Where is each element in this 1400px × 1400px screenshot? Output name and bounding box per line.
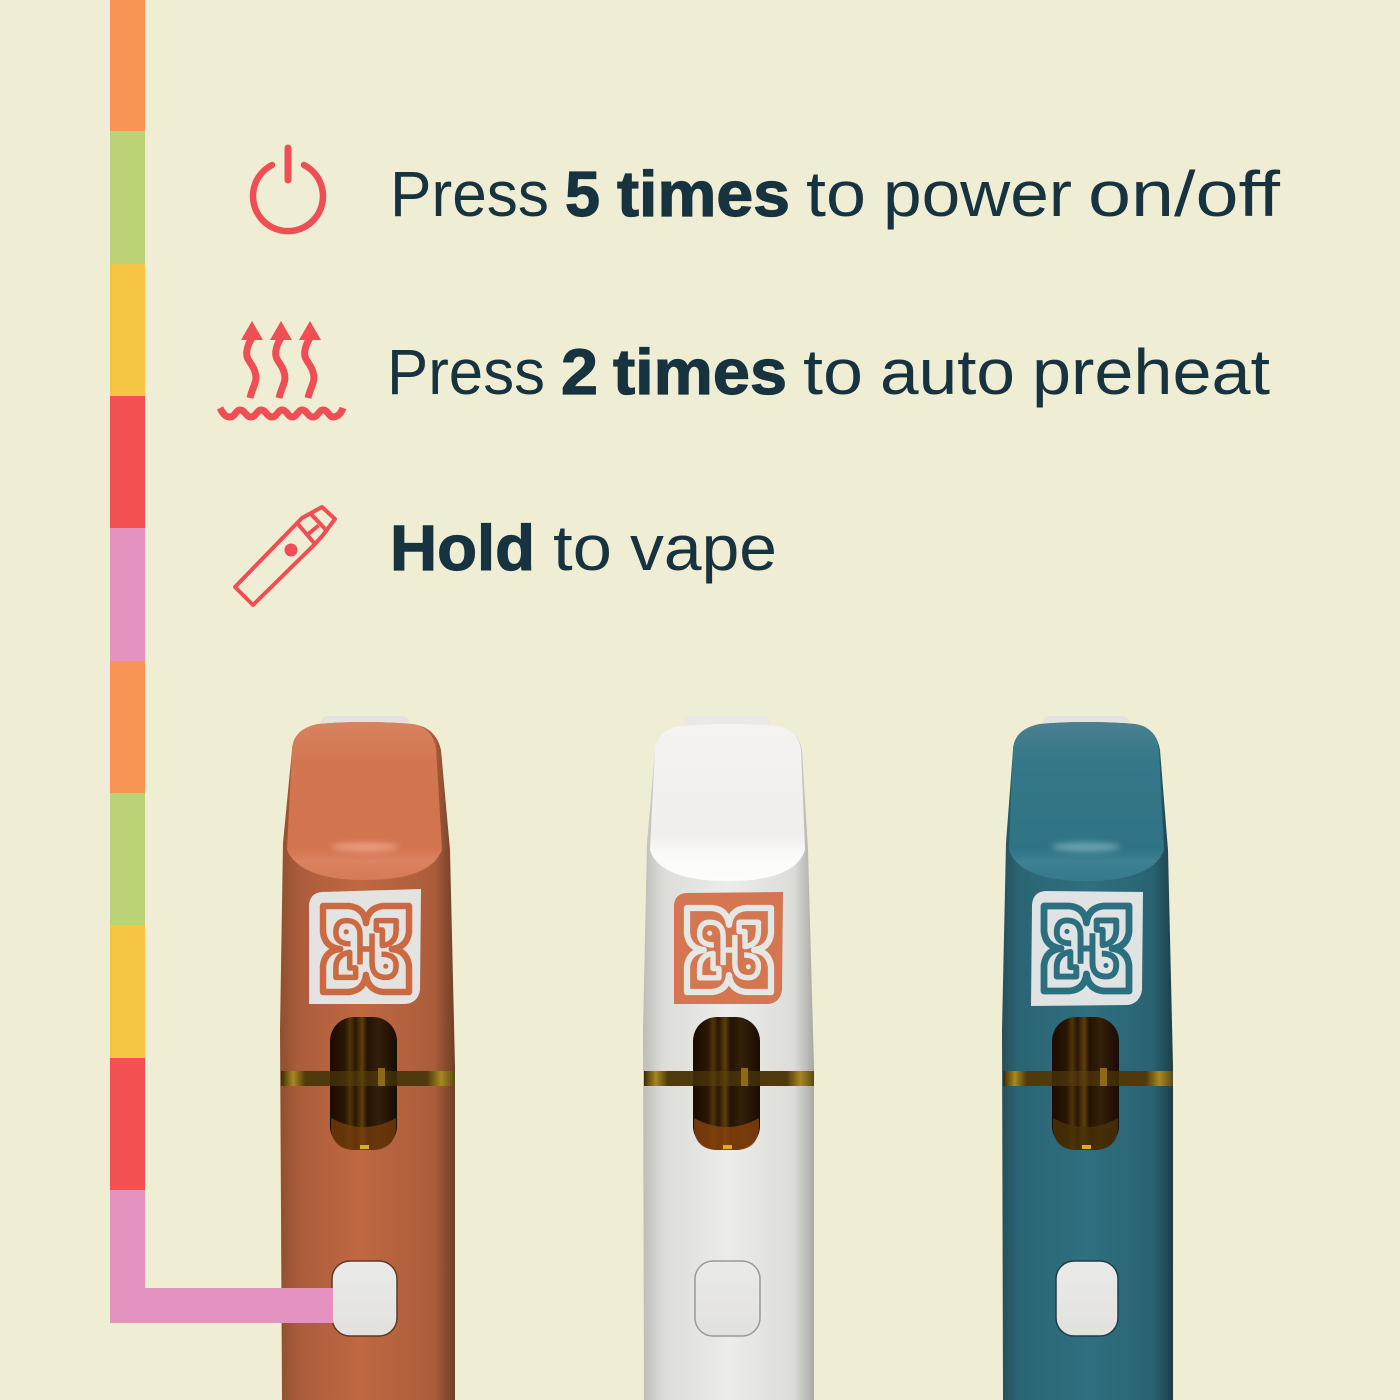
text: press 2 times: to xyxy=(803,336,863,408)
text: press 2 times: times xyxy=(613,336,787,408)
text: hold to vape: vape xyxy=(630,512,777,584)
logo xyxy=(1044,906,1129,991)
text: press 2 times: Press xyxy=(387,336,545,408)
text: hold to vape: to xyxy=(553,512,612,584)
device: teal pen xyxy=(1002,716,1173,1400)
icon: vape pen xyxy=(235,507,335,605)
text: press 2 times: preheat xyxy=(1032,336,1270,408)
icon: power xyxy=(253,148,323,231)
connector to button xyxy=(110,1288,333,1323)
text: press 5 times: power xyxy=(883,158,1072,230)
text: press 5 times: on/off xyxy=(1088,158,1280,230)
text: press 5 times: Press xyxy=(390,158,549,230)
text: press 2 times: auto xyxy=(880,336,1015,408)
text: press 5 times: to xyxy=(806,158,866,230)
text: hold to vape: Hold xyxy=(390,512,535,584)
text: press 2 times xyxy=(387,336,1270,408)
text: press 5 times: 5 xyxy=(565,158,600,230)
logo xyxy=(687,908,771,992)
device: orange pen xyxy=(280,716,455,1400)
text: press 5 times: times xyxy=(617,158,790,230)
logo xyxy=(323,906,409,992)
text: press 5 times xyxy=(390,158,1280,230)
device: white pen xyxy=(643,716,814,1400)
colour strip connector xyxy=(110,0,145,1323)
icon: heat waves xyxy=(220,321,343,417)
text: press 2 times: 2 xyxy=(561,336,598,408)
text: hold to vape xyxy=(390,512,777,584)
